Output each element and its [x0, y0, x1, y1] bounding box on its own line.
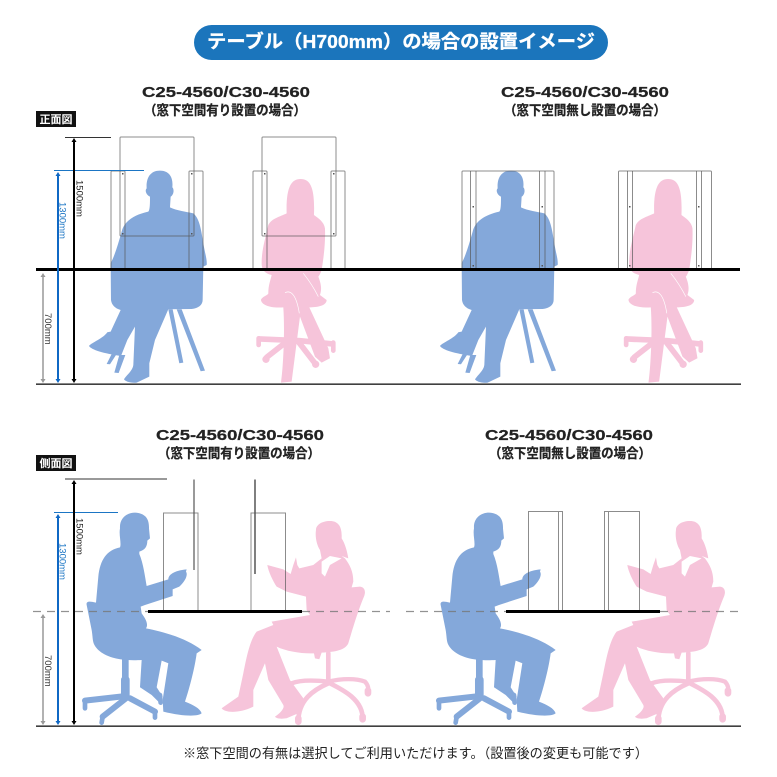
- heading: front right: C25-4560/C30-4560: [501, 85, 669, 101]
- figure: side man right: [439, 513, 556, 723]
- figure: front man right: [440, 171, 558, 383]
- label: front view: [36, 111, 76, 127]
- figure: front woman left: [259, 179, 333, 383]
- heading: front left: C25-4560/C30-4560: [142, 85, 310, 101]
- label: side view: [36, 455, 76, 471]
- table line: front: [36, 268, 740, 271]
- dimensions: front: [40, 138, 144, 383]
- heading: side left: （窓下空間有り設置の場合）: [158, 445, 320, 461]
- heading: side right: （窓下空間無し設置の場合）: [489, 445, 651, 461]
- dimensions: front: 1300mm: [56, 202, 68, 239]
- floor line: front: [36, 384, 741, 385]
- title pill: [194, 25, 608, 60]
- heading: front right: （窓下空間無し設置の場合）: [504, 102, 666, 118]
- heading: front right: [501, 85, 669, 118]
- panel: side left pair, with window gap: [164, 480, 286, 611]
- panel: front left pair, with window gap: [111, 137, 345, 269]
- label: side view: 側面図: [40, 457, 72, 470]
- dimensions: side: 1300mm: [56, 543, 68, 580]
- heading: front left: （窓下空間有り設置の場合）: [144, 102, 306, 118]
- dimensions: side: 700mm: [42, 655, 53, 687]
- heading: side left: C25-4560/C30-4560: [156, 428, 324, 444]
- title pill: テーブル（H700mm）の場合の設置イメージ: [207, 31, 595, 52]
- dimensions: side: 1500mm: [74, 518, 84, 555]
- floor line: side: [36, 726, 741, 727]
- dimensions: front: 700mm: [42, 313, 53, 345]
- heading: side left: [156, 428, 324, 461]
- panel: front right pair, no window gap: [462, 171, 712, 269]
- footnote: ※窓下空間の有無は選択してご利用いただけます。（設置後の変更も可能です）: [183, 746, 648, 761]
- dimensions: front: 1500mm: [74, 180, 84, 217]
- figure: front woman right: [626, 179, 701, 383]
- dimensions: side: [40, 479, 167, 725]
- dashed table height line: [33, 610, 739, 612]
- figure: side man left: [85, 513, 202, 723]
- panel: side right pair, no window gap: [528, 512, 640, 611]
- table: side right: [506, 610, 660, 613]
- heading: side right: C25-4560/C30-4560: [485, 428, 653, 444]
- heading: side right: [485, 428, 653, 461]
- label: front view: 正面図: [40, 113, 72, 126]
- figure: front man left: [89, 171, 207, 383]
- heading: front left: [142, 85, 310, 118]
- table: side left: [148, 610, 302, 613]
- figure: side woman right: [582, 521, 729, 722]
- figure: side woman left: [222, 521, 369, 722]
